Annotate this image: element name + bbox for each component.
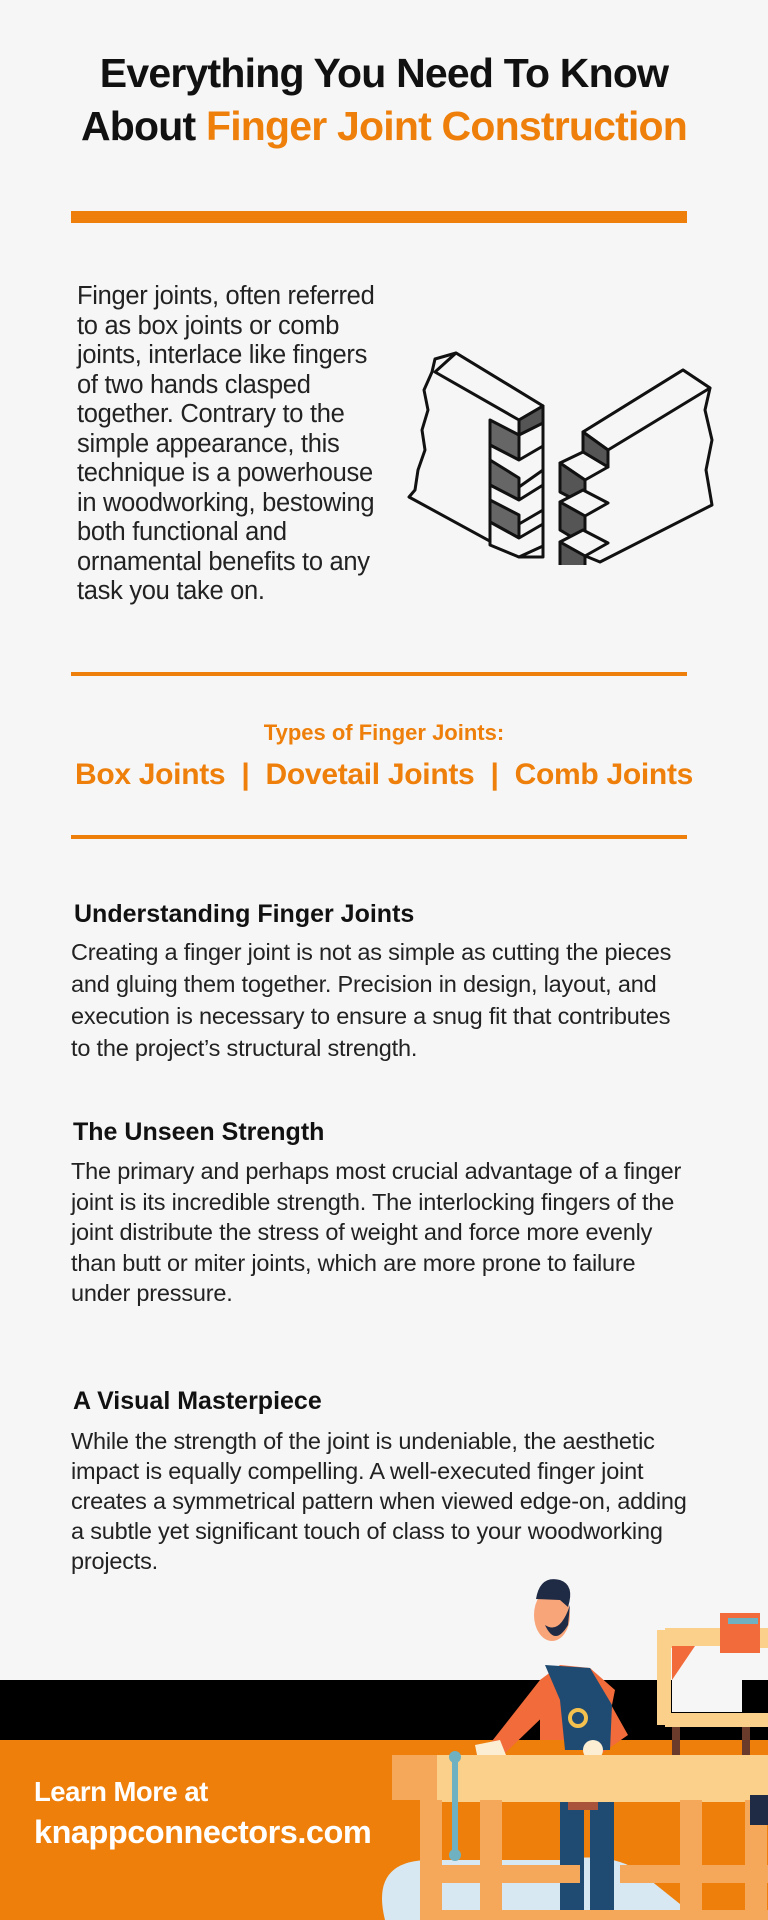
man [475,1579,628,1920]
text: While the strength of the joint is undeniable, the aesthetic [71,1428,655,1454]
intro text: of two hands clasped [77,370,311,398]
text [70,1158,681,1306]
text [71,939,671,1061]
footer text: Learn More at [34,1776,208,1807]
black band [0,1680,768,1740]
text: a subtle yet significant touch of class to your woodworking [71,1518,663,1544]
section: strength [70,1118,681,1306]
intro text: both functional and [77,518,287,546]
intro text: ornamental benefits to any [77,548,370,576]
title: Everything You Need To Know [100,50,668,96]
text: Creating a finger joint is not as simple as cutting the pieces [71,939,671,965]
title [81,50,687,149]
intro text: in woodworking, bestowing [77,488,374,516]
left piece [409,353,543,557]
heading: Understanding Finger Joints [74,900,414,928]
intro text: Finger joints, often referred [77,282,374,310]
text: joint is its incredible strength. The interlocking fingers of the [71,1189,674,1215]
intro text: to as box joints or comb [77,312,339,340]
floor blob [382,1858,700,1920]
text [71,1428,687,1574]
text: projects. [71,1548,158,1574]
heading: A Visual Masterpiece [73,1387,322,1415]
illustration: finger joint drawing [407,352,714,565]
types list: Box Joints | Dovetail Joints | Comb Joints [75,758,693,791]
types label: Types of Finger Joints: [264,720,504,745]
footer text: knappconnectors.com [34,1814,371,1850]
text: to the project’s structural strength. [71,1035,417,1061]
divider line [71,835,687,839]
section: understanding [71,900,671,1061]
heading: The Unseen Strength [73,1118,324,1146]
orange footer [0,1740,768,1920]
text: joint distribute the stress of weight and force more evenly [71,1219,652,1245]
title: About Finger Joint Construction [81,103,687,149]
intro text [76,282,374,605]
text: under pressure. [71,1280,233,1306]
right piece [560,370,712,583]
illustration: carpenter at workbench [382,1579,768,1920]
workbench [392,1751,768,1920]
text: impact is equally compelling. A well-executed finger joint [71,1458,643,1484]
text: execution is necessary to ensure a snug fit that contributes [71,1003,670,1029]
text: than butt or miter joints, which are more prone to failure [71,1250,635,1276]
text: The primary and perhaps most crucial advantage of a finger [71,1158,681,1184]
intro text: joints, interlace like fingers [77,341,367,369]
easel [657,1613,768,1777]
section: visual [71,1387,687,1574]
intro text: simple appearance, this [77,430,339,458]
intro text: technique is a powerhouse [77,459,373,487]
intro text: together. Contrary to the [77,400,344,428]
orange title bar [71,211,687,223]
footer text [34,1776,371,1850]
divider line [71,672,687,676]
intro text: task you take on. [77,577,265,605]
text: creates a symmetrical pattern when viewed edge-on, adding [71,1488,687,1514]
text: and gluing them together. Precision in design, layout, and [71,971,656,997]
